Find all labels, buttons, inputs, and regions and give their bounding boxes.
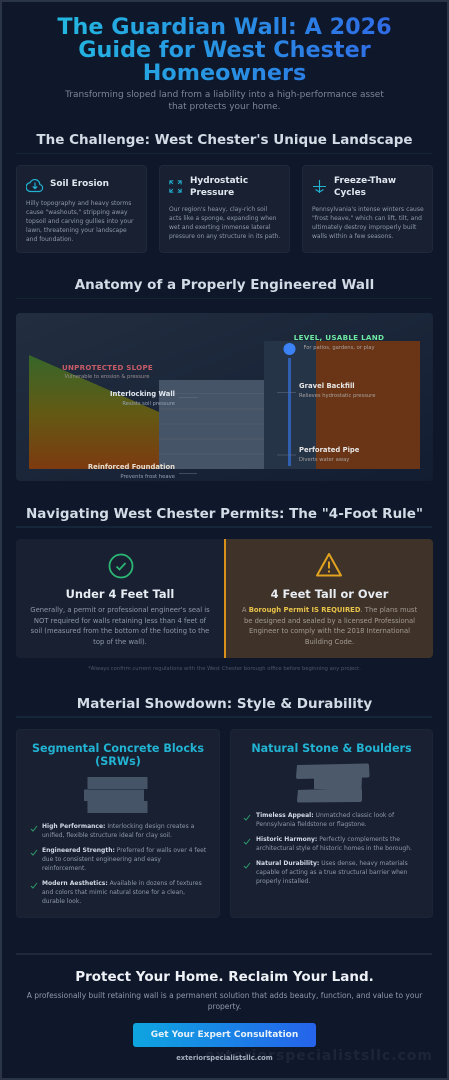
icon: check circle — [108, 554, 134, 578]
benefit: high performance — [42, 823, 194, 839]
heading: anatomy: Anatomy of a Properly Engineered Wall — [75, 277, 374, 293]
icon: warning triangle — [316, 553, 342, 576]
panel text: soil (measured from the bottom of the footing to the — [31, 627, 209, 635]
panel: hydrostatic pressure — [159, 165, 290, 253]
card text: Our region's heavy, clay-rich soil — [169, 206, 267, 213]
benefit: historic harmony — [256, 836, 412, 852]
panel text: Generally, a permit or professional engineer's seal is — [30, 606, 210, 614]
title: Homeowners — [143, 60, 306, 86]
material title — [32, 742, 204, 768]
retaining wall — [159, 380, 264, 469]
card text: Hilly topography and heavy storms — [26, 200, 131, 206]
label: unprotected slope: Vulnerable to erosion & pressure — [65, 374, 149, 380]
benefit: natural durability — [256, 860, 408, 885]
benefit: modern aesthetics — [42, 880, 202, 904]
retained soil — [316, 341, 420, 469]
card text: lawn, threatening your landscape — [26, 226, 127, 234]
panel: freeze-thaw cycles — [302, 165, 433, 253]
benefit: historic harmony: architectural style of historic homes in the borough. — [256, 845, 412, 852]
panel text: Building Code. — [305, 638, 354, 646]
panel: natural stone — [230, 729, 433, 918]
card text — [169, 206, 280, 240]
card text: "frost heave," which can lift, tilt, and — [312, 215, 422, 222]
check icon — [244, 862, 250, 869]
card text — [26, 200, 134, 242]
card text: ultimately destroy improperly built — [312, 224, 416, 231]
benefit: natural durability: properly installed. — [256, 878, 310, 885]
card title — [334, 176, 396, 198]
gravel backfill — [264, 341, 316, 469]
subtitle: Transforming sloped land from a liability into a high-performance asset — [65, 90, 384, 100]
card text: walls within a few seasons. — [312, 233, 393, 240]
panel text: NOT required for walls retaining less than 4 feet of — [34, 617, 206, 625]
panel text: top of the wall). — [93, 638, 147, 646]
check icon — [244, 814, 250, 821]
panel: segmental concrete blocks — [16, 729, 220, 918]
label: perforated pipe: Diverts water away — [299, 457, 349, 463]
icon: cloud download — [26, 179, 44, 192]
icon: stacked stones — [296, 764, 370, 802]
call to action text: A professionally built retaining wall is a permanent solution that adds beauty, function, and value to your — [27, 991, 422, 1000]
label: interlocking wall: Resists soil pressure — [122, 401, 175, 407]
title: The Guardian Wall: A 2026 — [57, 14, 392, 40]
material title: (SRWs) — [95, 755, 141, 768]
label: interlocking wall — [110, 390, 198, 407]
icon: pressure arrows — [169, 180, 182, 193]
benefit: engineered strength: due to consistent engineering and easy — [42, 856, 161, 863]
material title: Natural Stone & Boulders — [251, 742, 412, 754]
subtitle — [65, 90, 384, 112]
card title: Hydrostatic — [190, 176, 248, 186]
call to action text: property. — [208, 1002, 241, 1011]
label: level usable land — [294, 333, 384, 351]
label: reinforced foundation — [88, 463, 197, 480]
heading: permits: Navigating West Chester Permits: The "4-Foot Rule" — [26, 506, 423, 522]
chart: wall anatomy diagram — [16, 313, 433, 481]
title — [57, 14, 392, 86]
benefit: historic harmony: Historic Harmony: Perfectly complements the — [256, 836, 400, 843]
card text: and foundation. — [26, 236, 73, 242]
label: level usable land: LEVEL, USABLE LAND — [294, 333, 384, 342]
icon: stacked blocks — [84, 777, 148, 813]
label: level usable land: For patios, gardens, or play — [303, 345, 375, 351]
panel title: 4 Feet Tall or Over — [271, 586, 388, 600]
panel text — [30, 606, 210, 646]
panel: soil erosion — [16, 165, 147, 253]
call to action text — [26, 991, 422, 1011]
panel text: be designed and sealed by a licensed Professional — [244, 617, 415, 625]
benefit: engineered strength: reinforcement. — [42, 865, 86, 872]
benefit: timeless appeal: Pennsylvania fieldstone or flagstone. — [256, 820, 367, 828]
panel: under 4 feet — [16, 539, 224, 658]
benefit: timeless appeal — [256, 812, 394, 828]
card title: Freeze-Thaw — [334, 176, 396, 186]
heading: the challenge: The Challenge: West Chester's Unique Landscape — [36, 132, 413, 148]
heading: material showdown: Material Showdown: Style & Durability — [77, 696, 372, 712]
label: gravel backfill: Gravel Backfill — [299, 382, 355, 390]
benefit: engineered strength: Engineered Strength: Preferred for walls over 4 feet — [42, 847, 206, 854]
panel text: Engineer to comply with the 2018 International — [249, 627, 410, 635]
label: gravel backfill — [277, 382, 375, 399]
check icon — [30, 882, 38, 889]
check icon — [30, 850, 38, 856]
call to action heading: Protect Your Home. Reclaim Your Land. — [75, 969, 374, 985]
panel text: A Borough Permit IS REQUIRED. The plans must — [242, 606, 417, 614]
label: unprotected slope: UNPROTECTED SLOPE — [62, 363, 153, 372]
check icon — [244, 838, 250, 845]
benefit: modern aesthetics: durable look. — [42, 898, 81, 904]
benefit: high performance: High Performance: Interlocking design creates a — [42, 823, 194, 830]
card text: acts like a sponge, expanding when — [169, 215, 276, 222]
check icon — [30, 826, 38, 832]
button — [133, 1023, 316, 1047]
material title: Segmental Concrete Blocks — [32, 742, 204, 754]
label: reinforced foundation: Prevents frost heave — [120, 474, 175, 480]
label: perforated pipe — [277, 446, 360, 463]
panel text — [242, 606, 417, 646]
benefit: timeless appeal: Timeless Appeal: Unmatched classic look of — [256, 812, 394, 818]
button: Get Your Expert Consultation — [151, 1030, 298, 1040]
card title: Cycles — [334, 188, 366, 198]
card text: wet and exerting immense lateral — [169, 224, 270, 231]
drainage pipe — [284, 343, 296, 466]
card text: cause "washouts," stripping away — [26, 208, 128, 216]
watermark: exteriorspecialistsllc.com — [205, 1048, 433, 1064]
label: gravel backfill: Relieves hydrostatic pressure — [299, 393, 375, 399]
card title: Pressure — [190, 188, 234, 198]
label: interlocking wall: Interlocking Wall — [110, 390, 175, 398]
benefit: modern aesthetics: Modern Aesthetics: Available in dozens of textures — [42, 880, 202, 886]
panel: 4 feet or over — [224, 539, 433, 658]
card text: pressure on any structure in its path. — [169, 233, 280, 240]
subtitle: that protects your home. — [168, 102, 281, 112]
card text: Pennsylvania's intense winters cause — [312, 206, 424, 213]
benefit: natural durability: Natural Durability: Uses dense, heavy materials — [256, 860, 408, 867]
card title — [190, 176, 248, 198]
footnote: *Always confirm current regulations with the West Chester borough office before beginning any project. — [88, 666, 361, 672]
benefit: natural durability: capable of acting as a true structural barrier when — [256, 869, 407, 876]
panel title: Under 4 Feet Tall — [66, 586, 174, 600]
benefit: high performance: unified, flexible structure ideal for clay soil. — [42, 832, 172, 839]
title: Guide for West Chester — [78, 36, 371, 62]
icon: frost anchor — [313, 180, 326, 193]
label: reinforced foundation: Reinforced Foundation — [88, 463, 175, 471]
label: unprotected slope — [62, 363, 153, 380]
website url: exteriorspecialistsllc.com — [176, 1054, 273, 1062]
card title: Soil Erosion — [50, 179, 109, 189]
benefit: engineered strength — [42, 847, 206, 872]
benefit: modern aesthetics: and colors that mimic natural stone for a clean, — [42, 888, 185, 896]
card text — [312, 206, 424, 240]
label: perforated pipe: Perforated Pipe — [299, 446, 360, 454]
unprotected slope soil — [29, 355, 159, 469]
card text: topsoil and carving gullies into your — [26, 218, 133, 224]
